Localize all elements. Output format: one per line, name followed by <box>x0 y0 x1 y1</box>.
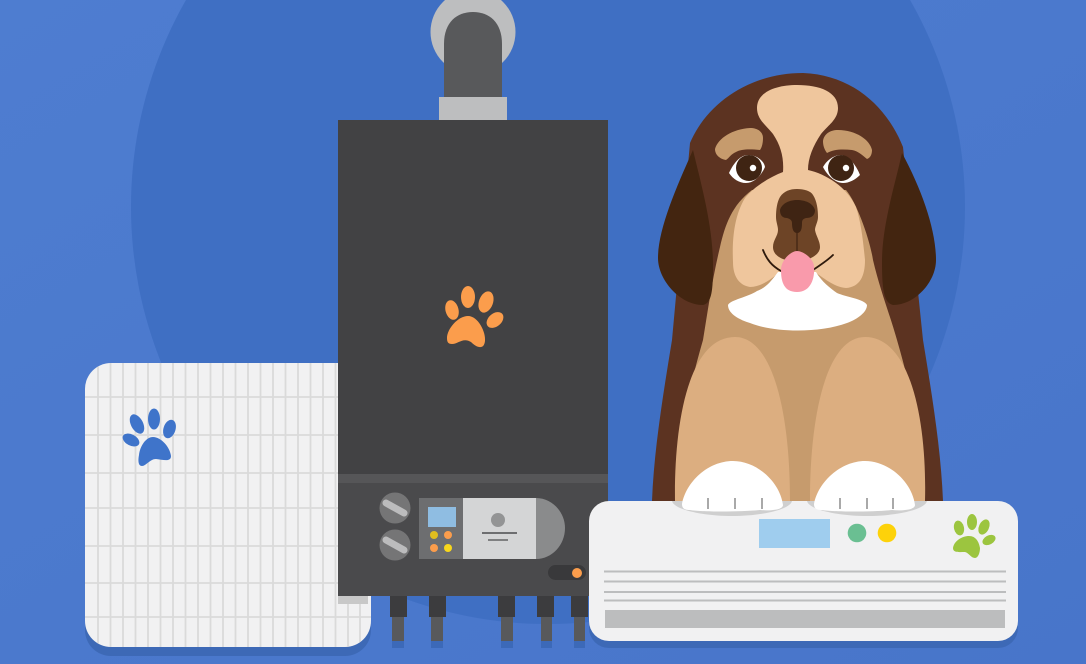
panel: boiler <box>338 120 608 604</box>
ears <box>658 150 713 305</box>
dog paws <box>682 461 915 512</box>
muzzle and blaze <box>733 85 865 288</box>
control panel <box>419 498 565 559</box>
icon: orange paw <box>443 286 506 347</box>
display <box>759 519 830 548</box>
chest <box>675 190 925 501</box>
icon: green paw <box>953 514 997 558</box>
panel: air conditioner <box>589 501 1018 648</box>
tongue <box>781 251 814 292</box>
eyebrow marks <box>715 128 872 160</box>
panel: radiator <box>85 363 371 656</box>
pipes under boiler <box>390 596 588 648</box>
indicator lights <box>848 524 896 542</box>
nose and snout <box>773 189 820 260</box>
status toggle <box>548 565 586 580</box>
vents <box>604 572 1006 600</box>
white chin <box>728 272 867 330</box>
eyes <box>729 155 860 183</box>
background circle <box>131 0 965 624</box>
control knobs <box>380 492 410 560</box>
icon: blue paw <box>120 408 178 466</box>
paw shadows <box>672 501 927 516</box>
mouth <box>763 250 833 271</box>
flue pipe <box>430 0 516 121</box>
dog <box>652 73 943 501</box>
legs <box>675 337 925 501</box>
dog body <box>652 73 943 501</box>
